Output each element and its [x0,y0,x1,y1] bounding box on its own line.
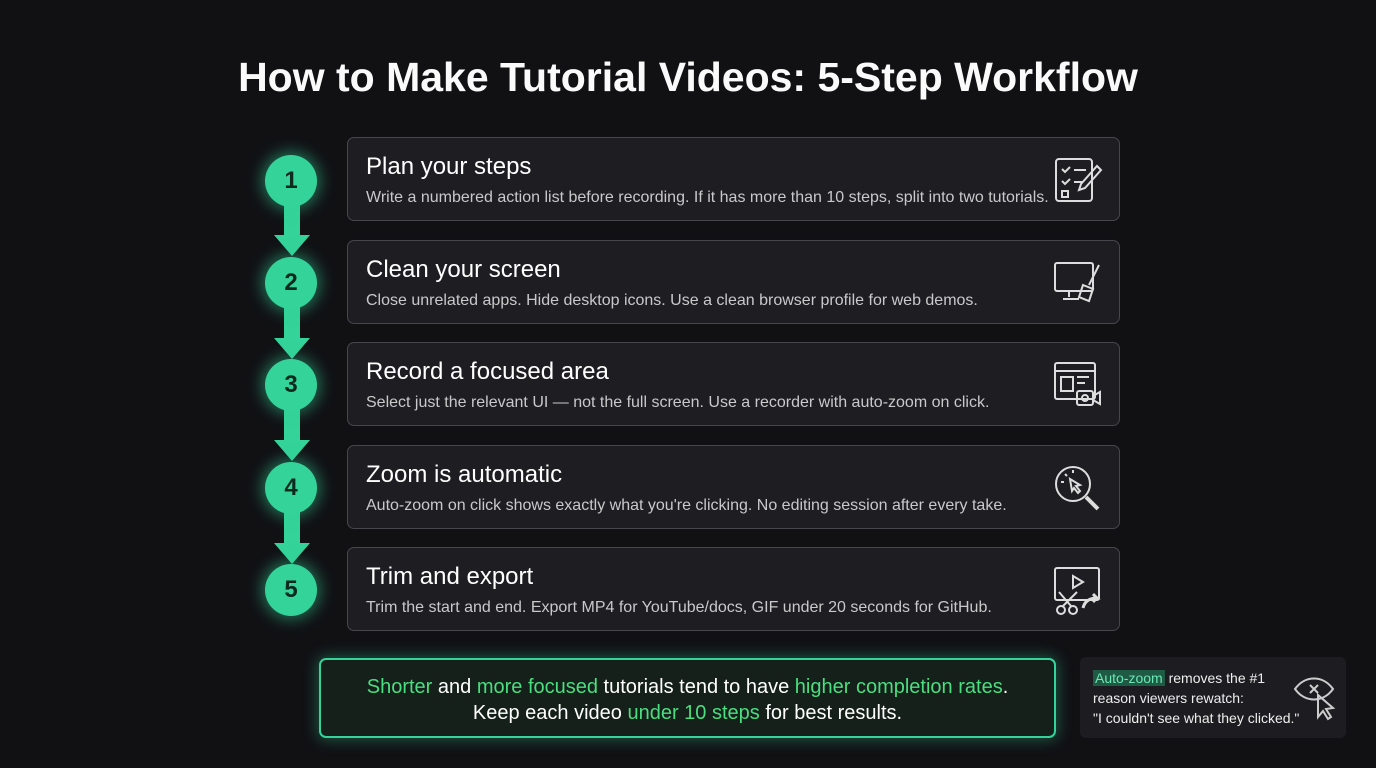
arrows connector [274,205,310,564]
card: trim: Trim the start and end. Export MP4 for YouTube/docs, GIF under 20 seconds for GitHub. [366,599,992,616]
callout: completion rates: Keep each video under 10 steps for best results. [473,702,902,724]
card: trim [347,547,1120,631]
card: clean: Clean your screen [366,256,561,283]
card: zoom: Zoom is automatic [366,461,562,488]
card: record: Select just the relevant UI — not the full screen. Use a recorder with auto-zoom on click. [366,394,989,411]
step number 2: 2 [284,269,298,296]
card: trim: Trim and export [366,563,533,590]
title: How to Make Tutorial Videos: 5-Step Workflow [238,54,1138,100]
card: record [347,342,1120,426]
card: clean: Close unrelated apps. Hide desktop icons. Use a clean browser profile for web demos. [366,292,978,309]
side note: auto-zoom: "I couldn't see what they clicked." [1093,710,1299,726]
card: plan [347,137,1120,221]
side note: auto-zoom: Auto-zoom removes the #1 [1095,670,1265,686]
side note: auto-zoom: reason viewers rewatch: [1093,690,1244,706]
card: clean [347,240,1120,324]
step number 4: 4 [284,474,298,501]
step number 1 [265,155,317,207]
step number 3 [265,359,317,411]
callout: completion rates [319,658,1056,738]
card: zoom [347,445,1120,529]
step number 1: 1 [284,167,298,194]
step number 4 [265,462,317,514]
card: plan: Plan your steps [366,153,531,180]
step number 5: 5 [284,576,298,603]
step number 5 [265,564,317,616]
step number 2 [265,257,317,309]
step number 3: 3 [284,371,298,398]
callout: completion rates: Shorter and more focused tutorials tend to have higher completion rates. [367,676,1008,698]
card: plan: Write a numbered action list before recording. If it has more than 10 steps, split into two tutorials. [366,189,1049,206]
card: zoom: Auto-zoom on click shows exactly what you're clicking. No editing session after every take. [366,497,1007,514]
icon: eye with cursor [1294,678,1336,720]
card: record: Record a focused area [366,358,609,385]
side note: auto-zoom [1080,657,1346,738]
